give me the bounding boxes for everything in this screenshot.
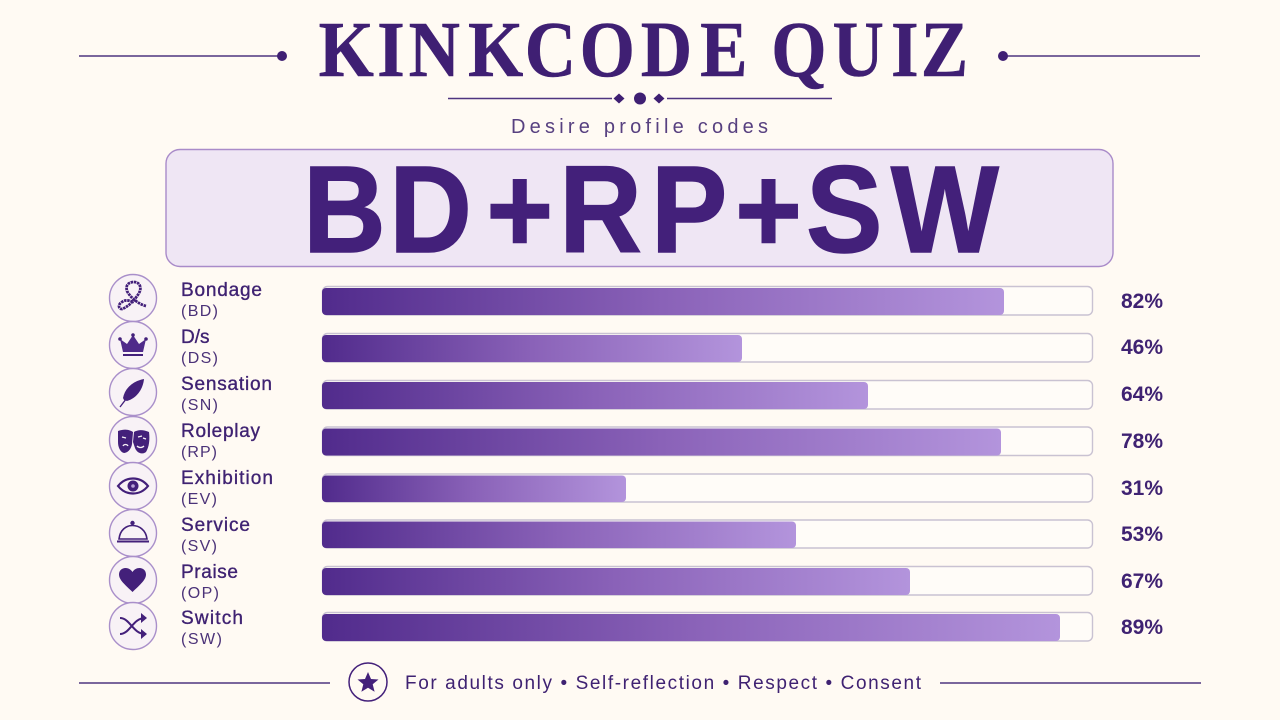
label (181, 562, 238, 602)
icon: heart (110, 556, 156, 604)
label: (OP) (181, 585, 219, 602)
label: Service (181, 515, 250, 536)
label: (SV) (181, 538, 217, 555)
title divider (448, 92, 832, 104)
row: D/s (110, 322, 1163, 368)
label: Sensation (181, 374, 272, 395)
icon: rope (110, 274, 156, 322)
label (181, 421, 260, 461)
footer note: For adults only • Self-reflection • Respect • Consent (405, 673, 922, 694)
label: Roleplay (181, 421, 260, 442)
icon: crown (110, 322, 156, 368)
icon: feather (110, 368, 156, 416)
label (181, 468, 273, 508)
title ornament right (998, 51, 1200, 61)
label (181, 608, 243, 648)
value: 46% (1121, 336, 1163, 359)
label: Bondage (181, 280, 262, 301)
panel: profile code (166, 141, 1113, 279)
bar (322, 474, 1092, 502)
label: (RP) (181, 444, 217, 461)
label: D/s (181, 327, 210, 348)
label (181, 280, 262, 320)
label: (BD) (181, 303, 218, 320)
subtitle: Desire profile codes (511, 116, 768, 138)
value: 89% (1121, 616, 1163, 639)
value: 64% (1121, 383, 1163, 406)
label: Praise (181, 562, 238, 583)
row: Roleplay (110, 416, 1163, 464)
footer line left (79, 682, 330, 684)
row: Exhibition (110, 462, 1163, 510)
icon: cloche (110, 510, 156, 556)
label (181, 327, 218, 367)
bar (322, 520, 1092, 548)
bar (322, 566, 1092, 595)
value: 31% (1121, 477, 1163, 500)
value: 53% (1121, 523, 1163, 546)
row: Bondage (110, 274, 1163, 322)
value: 82% (1121, 290, 1163, 313)
profile code text: BD+RP+SW (303, 141, 999, 279)
row: Service (110, 510, 1163, 556)
footer line right (940, 682, 1201, 684)
bar (322, 286, 1092, 315)
bar (322, 380, 1092, 409)
title: KINKCODE QUIZ (319, 7, 968, 94)
label (181, 515, 250, 555)
icon: shuffle arrows (110, 602, 156, 650)
row: Praise (110, 556, 1163, 604)
label: (SW) (181, 631, 222, 648)
label: Exhibition (181, 468, 273, 489)
label: (EV) (181, 491, 217, 508)
label: (DS) (181, 350, 218, 367)
icon: star badge (349, 663, 387, 701)
label: (SN) (181, 397, 218, 414)
label (181, 374, 272, 414)
bar (322, 334, 1092, 362)
value: 67% (1121, 570, 1163, 593)
bar (322, 612, 1092, 641)
value: 78% (1121, 430, 1163, 453)
row: Sensation (110, 368, 1163, 416)
icon: theatre masks (110, 416, 156, 464)
bar (322, 427, 1092, 456)
label: Switch (181, 608, 243, 629)
row: Switch (110, 602, 1163, 650)
title ornament left (79, 51, 287, 61)
icon: eye (110, 462, 156, 510)
